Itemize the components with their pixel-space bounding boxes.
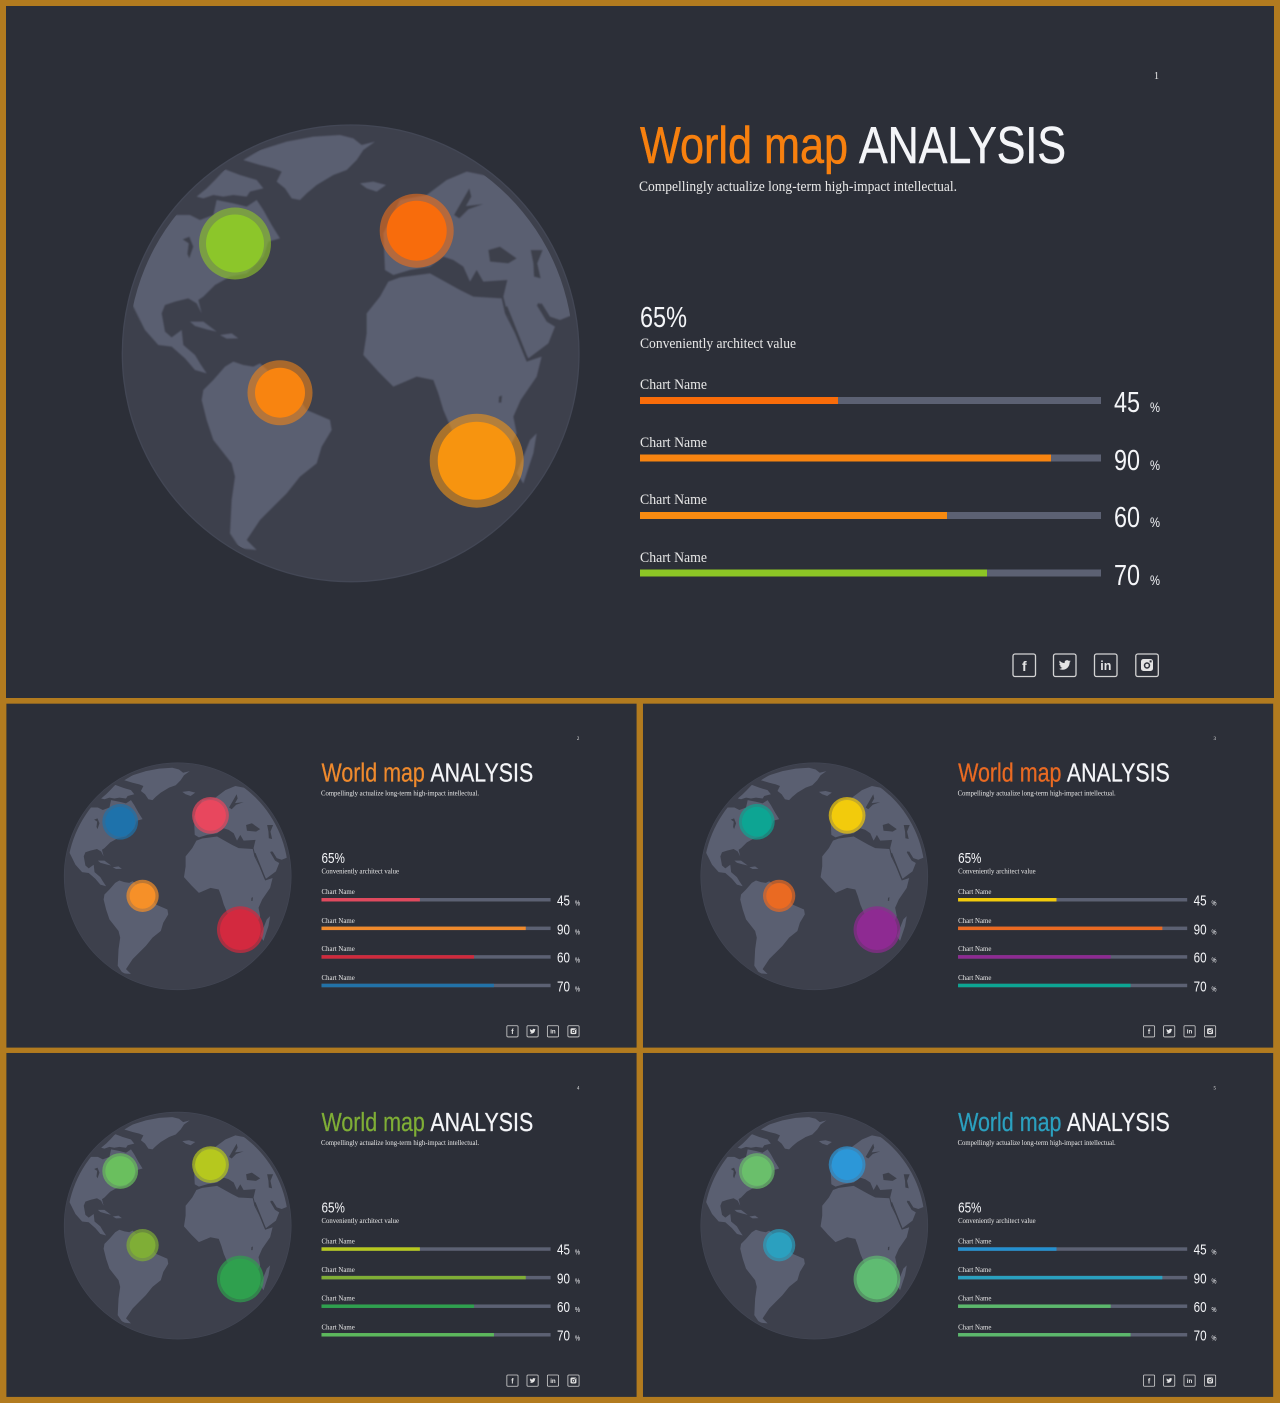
headline stat: Conveniently architect value bbox=[958, 868, 1036, 876]
headline stat: 65% bbox=[321, 851, 345, 867]
bar chart: Chart Name bbox=[321, 1266, 355, 1274]
bar chart: % bbox=[1212, 1307, 1217, 1314]
bar chart bbox=[958, 1237, 1217, 1345]
social icons bbox=[507, 1375, 579, 1386]
title: World map bbox=[640, 117, 848, 175]
bar chart: Chart Name bbox=[640, 377, 707, 393]
headline stat: Conveniently architect value bbox=[958, 1217, 1036, 1225]
bar chart: 70 bbox=[557, 979, 570, 995]
social icons: f bbox=[1022, 658, 1027, 674]
page number: 4 bbox=[577, 1086, 580, 1091]
social icons: f bbox=[1148, 1378, 1151, 1385]
bar chart: Chart Name bbox=[958, 1294, 991, 1302]
headline stat bbox=[958, 1201, 1036, 1225]
map markers bbox=[102, 1146, 264, 1302]
title: ANALYSIS bbox=[1067, 760, 1170, 788]
social icons bbox=[1143, 1375, 1216, 1386]
title: ANALYSIS bbox=[859, 117, 1066, 175]
bar chart bbox=[640, 377, 1160, 592]
bar chart: Chart Name bbox=[958, 974, 991, 982]
bar chart: Chart Name bbox=[958, 888, 991, 896]
title bbox=[958, 760, 1170, 788]
globe map bbox=[64, 1112, 302, 1339]
page number: 5 bbox=[1214, 1086, 1217, 1091]
bar chart: % bbox=[575, 986, 580, 993]
bar chart: Chart Name bbox=[958, 917, 991, 925]
bar chart: 90 bbox=[557, 922, 570, 938]
bar chart: 60 bbox=[1114, 502, 1140, 534]
map markers bbox=[739, 1146, 900, 1302]
bar chart: % bbox=[1150, 399, 1160, 415]
bar chart: 70 bbox=[1194, 979, 1207, 995]
bar chart: % bbox=[1150, 457, 1160, 473]
panel: slide 3 bbox=[643, 704, 1273, 1048]
headline stat: 65% bbox=[321, 1201, 345, 1217]
bar chart: 90 bbox=[1114, 445, 1140, 477]
social icons: f bbox=[511, 1378, 514, 1385]
title: World map bbox=[958, 760, 1061, 788]
bar chart: Chart Name bbox=[958, 1323, 991, 1331]
bar chart: 90 bbox=[1194, 1272, 1207, 1288]
bar chart: Chart Name bbox=[640, 435, 707, 451]
bar chart: 60 bbox=[1194, 1300, 1207, 1316]
bar chart: 45 bbox=[557, 1243, 570, 1259]
subtitle: Compellingly actualize long-term high-impact intellectual. bbox=[958, 1138, 1116, 1147]
subtitle: Compellingly actualize long-term high-impact intellectual. bbox=[639, 179, 957, 195]
social icons: f bbox=[1148, 1029, 1151, 1036]
headline stat: 65% bbox=[958, 1201, 982, 1217]
title: World map bbox=[321, 1109, 425, 1137]
title bbox=[321, 760, 533, 788]
title: ANALYSIS bbox=[430, 1109, 533, 1137]
bar chart: % bbox=[1212, 1279, 1217, 1286]
bar chart: Chart Name bbox=[321, 888, 355, 896]
subtitle: Compellingly actualize long-term high-impact intellectual. bbox=[321, 789, 479, 798]
subtitle: Compellingly actualize long-term high-impact intellectual. bbox=[958, 789, 1116, 798]
globe map bbox=[701, 1112, 938, 1339]
bar chart: 70 bbox=[557, 1329, 570, 1345]
bar chart: 60 bbox=[557, 951, 570, 967]
map markers bbox=[102, 797, 264, 953]
social icons bbox=[1143, 1026, 1216, 1037]
bar chart: Chart Name bbox=[640, 492, 707, 508]
bar chart: % bbox=[575, 958, 580, 965]
bar chart: % bbox=[1212, 929, 1217, 936]
globe map bbox=[122, 125, 600, 582]
page number: 2 bbox=[577, 737, 580, 742]
social icons bbox=[1013, 654, 1158, 676]
bar chart: Chart Name bbox=[958, 945, 991, 953]
bar chart: 70 bbox=[1114, 560, 1140, 592]
social icons: in bbox=[550, 1378, 556, 1385]
bar chart: % bbox=[1212, 986, 1217, 993]
headline stat bbox=[958, 851, 1036, 876]
social icons: in bbox=[550, 1029, 556, 1036]
bar chart: 90 bbox=[1194, 922, 1207, 938]
bar chart: % bbox=[575, 1307, 580, 1314]
bar chart: Chart Name bbox=[958, 1266, 991, 1274]
bar chart: 70 bbox=[1194, 1329, 1207, 1345]
subtitle: Compellingly actualize long-term high-impact intellectual. bbox=[321, 1138, 479, 1147]
bar chart bbox=[321, 888, 580, 995]
social icons: in bbox=[1187, 1378, 1193, 1385]
social icons: in bbox=[1187, 1029, 1193, 1036]
page number: 1 bbox=[1154, 71, 1159, 82]
headline stat: Conveniently architect value bbox=[321, 1217, 399, 1225]
globe map bbox=[64, 763, 302, 990]
bar chart bbox=[321, 1237, 580, 1345]
bar chart: % bbox=[1150, 514, 1160, 530]
bar chart: 45 bbox=[557, 893, 570, 909]
page number: 3 bbox=[1214, 737, 1217, 742]
bar chart: % bbox=[1150, 572, 1160, 588]
headline stat bbox=[640, 302, 796, 352]
title: World map bbox=[958, 1109, 1061, 1137]
title: ANALYSIS bbox=[430, 760, 533, 788]
bar chart: % bbox=[575, 900, 580, 907]
bar chart: % bbox=[1212, 900, 1217, 907]
bar chart: Chart Name bbox=[321, 1323, 355, 1331]
bar chart: % bbox=[575, 1336, 580, 1343]
bar chart: Chart Name bbox=[958, 1237, 991, 1245]
bar chart: 45 bbox=[1114, 387, 1140, 419]
headline stat bbox=[321, 851, 399, 876]
bar chart: 60 bbox=[1194, 951, 1207, 967]
bar chart: % bbox=[1212, 1336, 1217, 1343]
bar chart: Chart Name bbox=[640, 550, 707, 566]
panel: slide 5 bbox=[643, 1053, 1273, 1397]
title: World map bbox=[321, 760, 425, 788]
bar chart: 45 bbox=[1194, 1243, 1207, 1259]
map markers bbox=[199, 194, 524, 508]
social icons: f bbox=[511, 1029, 514, 1036]
bar chart: Chart Name bbox=[321, 1294, 355, 1302]
title: ANALYSIS bbox=[1067, 1109, 1170, 1137]
bar chart: 60 bbox=[557, 1300, 570, 1316]
bar chart: Chart Name bbox=[321, 974, 355, 982]
bar chart: Chart Name bbox=[321, 917, 355, 925]
bar chart: % bbox=[575, 929, 580, 936]
title bbox=[958, 1109, 1170, 1137]
headline stat: 65% bbox=[958, 851, 982, 867]
title bbox=[321, 1109, 533, 1137]
headline stat: Conveniently architect value bbox=[321, 868, 399, 876]
social icons: in bbox=[1100, 659, 1111, 673]
panel: slide 4 bbox=[6, 1053, 637, 1397]
social icons bbox=[507, 1026, 579, 1037]
title bbox=[640, 117, 1066, 175]
bar chart: % bbox=[575, 1279, 580, 1286]
headline stat: Conveniently architect value bbox=[640, 336, 796, 352]
panel: slide 2 bbox=[6, 704, 637, 1048]
bar chart: 90 bbox=[557, 1272, 570, 1288]
bar chart: % bbox=[1212, 958, 1217, 965]
globe map bbox=[701, 763, 938, 990]
bar chart: % bbox=[575, 1250, 580, 1257]
map markers bbox=[739, 797, 900, 953]
bar chart: % bbox=[1212, 1250, 1217, 1257]
panel: main slide bbox=[6, 6, 1274, 698]
headline stat: 65% bbox=[640, 302, 687, 334]
bar chart: Chart Name bbox=[321, 945, 355, 953]
bar chart bbox=[958, 888, 1217, 995]
headline stat bbox=[321, 1201, 399, 1225]
bar chart: 45 bbox=[1194, 893, 1207, 909]
bar chart: Chart Name bbox=[321, 1237, 355, 1245]
